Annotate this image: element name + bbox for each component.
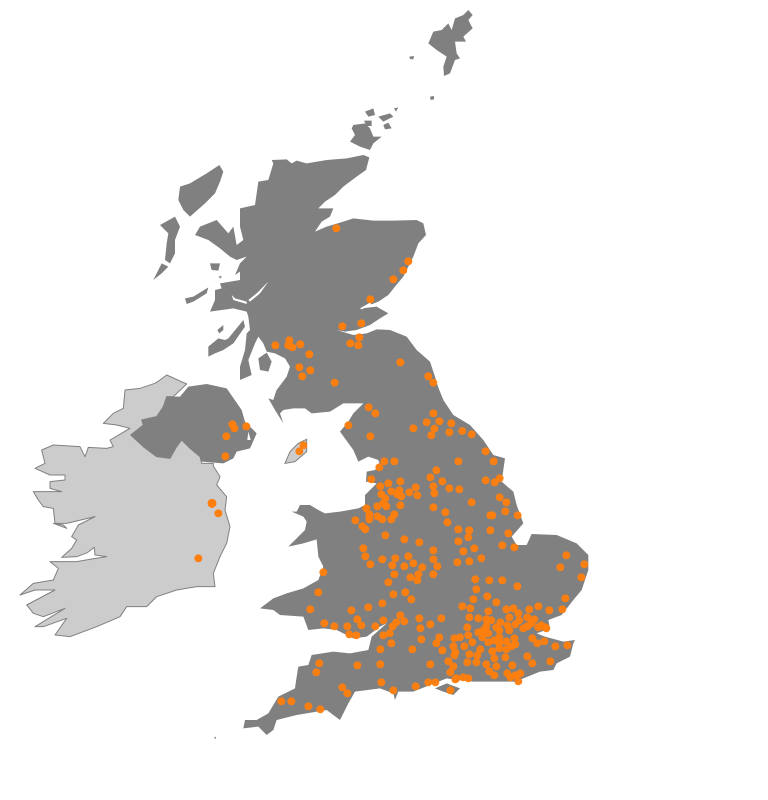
location dots: Scotland	[271, 224, 432, 380]
land: Northern Ireland	[131, 384, 257, 463]
land: England and Wales	[214, 380, 588, 739]
location dots: England, Wales and Isle of Man	[277, 379, 588, 713]
land: Scotland and islands	[153, 10, 473, 400]
land: Isle of Man	[285, 439, 307, 463]
land: Republic of Ireland	[20, 375, 230, 637]
location dots: Ireland	[194, 420, 250, 562]
